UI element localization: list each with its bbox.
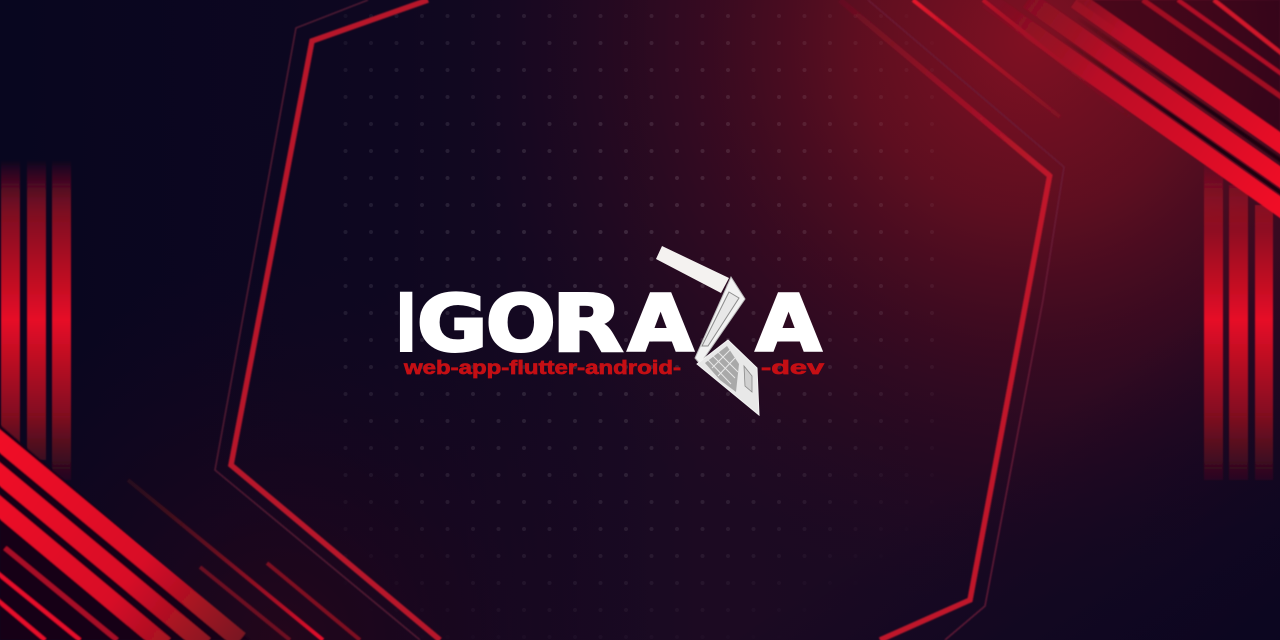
logo tagline: -dev [761, 358, 825, 379]
logo wordmark: A [628, 279, 693, 370]
left vertical bars [1, 160, 71, 480]
logo tagline [403, 358, 825, 379]
logo wordmark: I [396, 279, 416, 369]
dot grid [344, 14, 934, 612]
logo wordmark: G [417, 279, 487, 370]
hexagon frame [215, 0, 1064, 640]
bottom left diagonal stripes [0, 425, 360, 640]
right vertical bars [1204, 165, 1273, 480]
logo wordmark: O [486, 278, 556, 369]
logo wordmark: R [552, 279, 623, 370]
top right diagonal stripes [913, 0, 1280, 214]
logo [396, 246, 825, 415]
logo wordmark: A [756, 279, 821, 370]
logo tagline: web-app-flutter-android- [403, 358, 681, 379]
logo wordmark [396, 278, 821, 370]
icon: open laptop [656, 246, 759, 415]
